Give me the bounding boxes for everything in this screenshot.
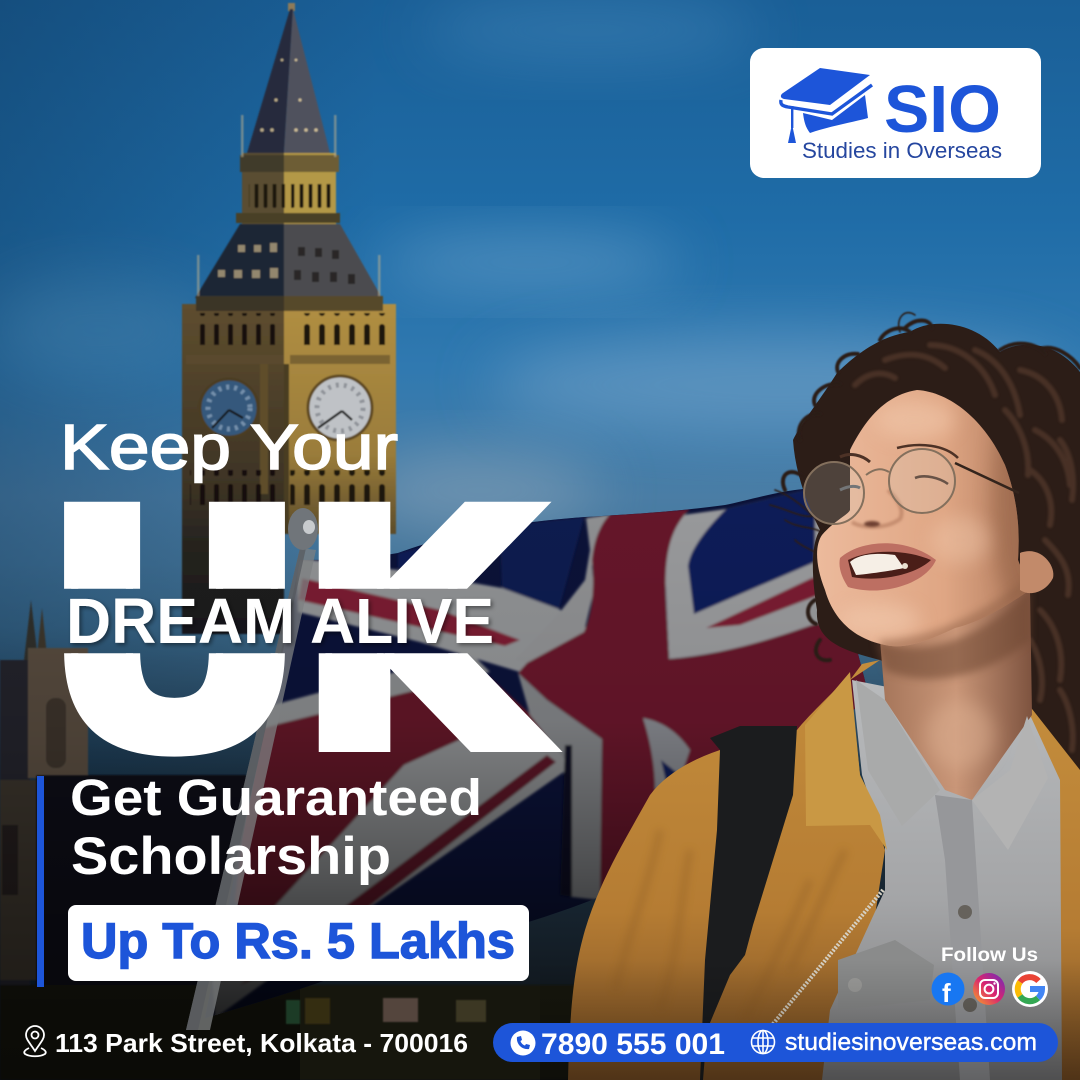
flag: vertical grey border xyxy=(560,516,611,628)
flag: lower right navy sliver xyxy=(660,760,676,780)
shirt xyxy=(822,680,1062,1080)
neck highlight xyxy=(926,701,994,769)
address: 113 Park Street, Kolkata - 700016 xyxy=(55,1028,468,1058)
subheading: Get Guaranteed xyxy=(70,769,482,826)
zipper xyxy=(773,890,883,1024)
flag: lower right grey curve xyxy=(643,718,690,790)
glasses xyxy=(804,449,1019,524)
flag: lower diagonal red stripe xyxy=(240,755,556,985)
face shading xyxy=(840,399,1026,646)
scholarship amount badge xyxy=(68,905,529,981)
heading: dream alive: DREAM ALIVE xyxy=(66,585,494,657)
subheading: Scholarship xyxy=(71,827,391,886)
under chin shadow xyxy=(875,590,1030,679)
icon: google xyxy=(1012,971,1048,1007)
left side darkening xyxy=(0,560,300,1080)
icon: facebook: f xyxy=(942,978,951,1008)
flag: upper navy triangle xyxy=(500,517,584,609)
mouth xyxy=(839,543,936,591)
flag: upper right grey band xyxy=(661,480,870,659)
union jack flag xyxy=(214,489,866,1016)
hair xyxy=(793,324,1080,800)
flag: red cross center xyxy=(518,509,880,900)
face xyxy=(817,390,1030,646)
logo panel xyxy=(750,48,1041,178)
bottom photo fade xyxy=(540,960,1080,1080)
buttons xyxy=(848,905,977,1012)
icon: globe xyxy=(752,1030,774,1054)
jacket right xyxy=(1025,700,1080,1080)
big ben clock tower xyxy=(182,3,396,634)
lower roof xyxy=(195,224,382,298)
neck xyxy=(880,590,1032,800)
parliament building xyxy=(0,600,600,1080)
follow us xyxy=(932,945,1048,1008)
website: studiesinoverseas.com xyxy=(785,1029,1037,1056)
scholarship amount badge: Up To Rs. 5 Lakhs xyxy=(81,913,515,969)
pinnacles xyxy=(197,115,380,297)
flag: lower left red field xyxy=(236,674,550,905)
follow us: Follow Us xyxy=(941,945,1038,966)
icon: instagram xyxy=(973,973,1005,1005)
flag: upper right red stripe xyxy=(706,576,815,629)
jacket collar xyxy=(805,672,887,850)
contact pill xyxy=(493,1023,1058,1062)
flag: lower diagonal grey band xyxy=(212,735,578,1018)
clock faces xyxy=(200,376,372,440)
icon: phone xyxy=(510,1030,536,1056)
spire xyxy=(247,3,330,153)
shirt placket xyxy=(935,795,990,1080)
flag pole xyxy=(186,508,318,1030)
shirt right collar xyxy=(972,716,1048,850)
heading: giant UK: U xyxy=(41,445,308,822)
heading: giant UK: K xyxy=(297,445,549,822)
flag: upper right navy xyxy=(688,488,815,614)
ear xyxy=(1020,551,1053,593)
hair curls xyxy=(770,313,1080,660)
flag: lower left grey band xyxy=(262,652,490,728)
flag: lower navy sliver xyxy=(560,745,572,897)
heading: keep your: Keep Your xyxy=(60,411,398,483)
eyebrows and eyes xyxy=(840,445,958,490)
subheading xyxy=(70,769,482,886)
hair highlights xyxy=(855,345,1073,750)
icon: location pin xyxy=(24,1026,46,1056)
logo tagline: Studies in Overseas xyxy=(802,138,1002,163)
flag: upper left navy xyxy=(398,546,421,569)
street details xyxy=(286,998,486,1024)
shirt left collar xyxy=(856,680,940,826)
flag: upper left red stripe xyxy=(298,578,520,646)
accent bar xyxy=(37,776,44,987)
girl student xyxy=(568,313,1080,1080)
backpack strap xyxy=(700,726,797,1080)
flag: upper left grey diagonal xyxy=(296,558,590,672)
logo wordmark: SIO xyxy=(884,72,1001,147)
jacket body xyxy=(568,660,885,1080)
nose xyxy=(852,490,902,527)
chest pocket flap xyxy=(838,940,934,1010)
clock stage xyxy=(182,296,396,634)
flag: lower grey wedge xyxy=(518,673,602,900)
belfry xyxy=(236,153,340,225)
jacket folds xyxy=(615,830,845,1020)
heading: giant UK xyxy=(64,502,562,757)
icon: graduation cap xyxy=(781,68,872,143)
phone number: 7890 555 001 xyxy=(541,1028,725,1061)
